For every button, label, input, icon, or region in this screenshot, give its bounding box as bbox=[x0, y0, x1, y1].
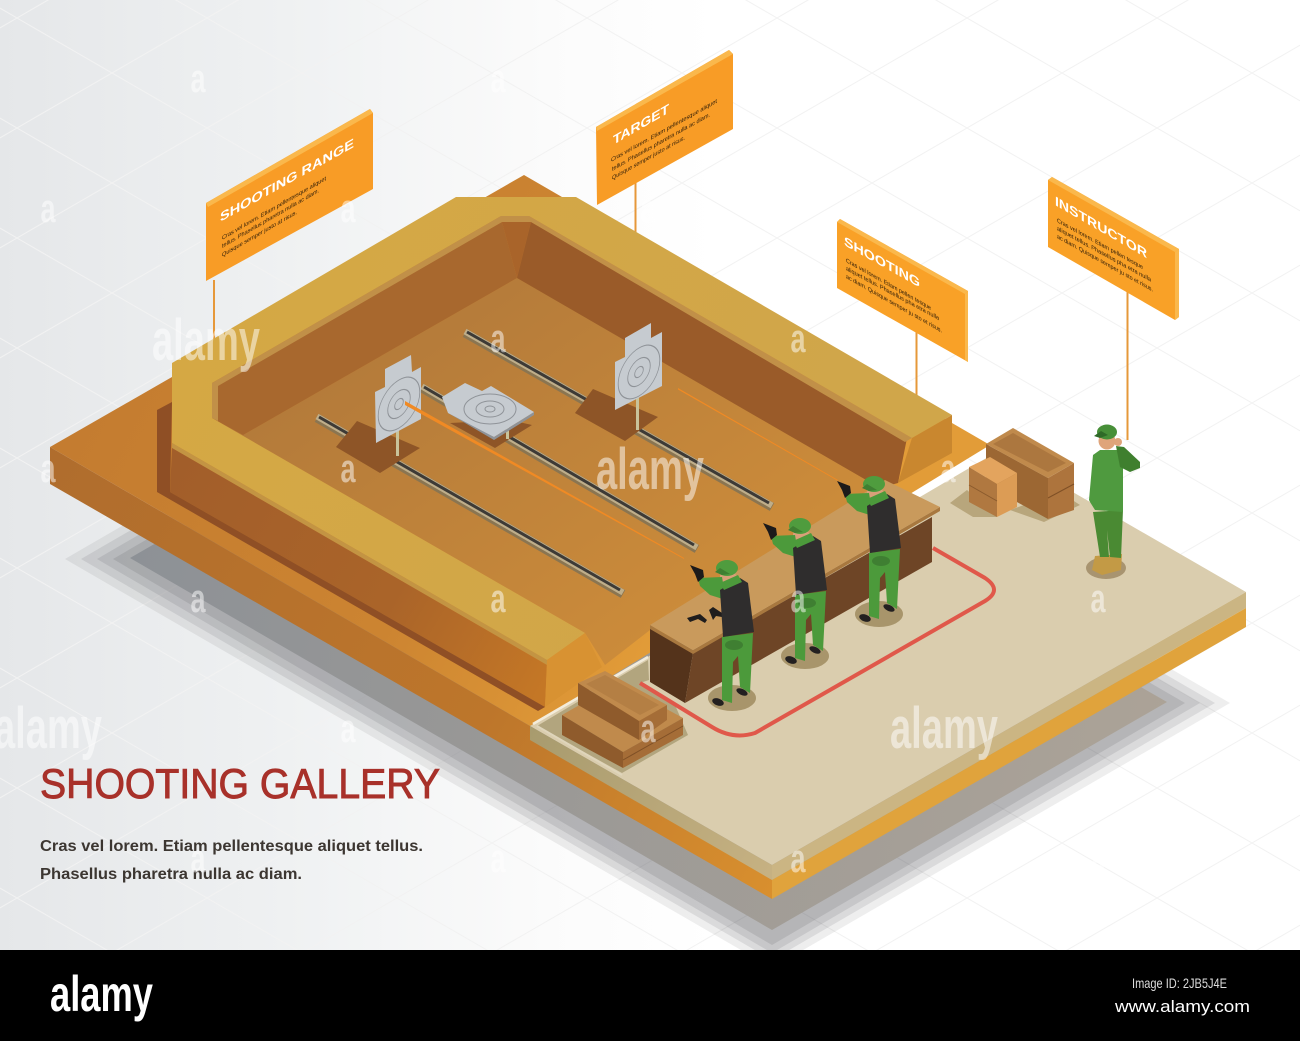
stock watermarks: a bbox=[1240, 447, 1256, 491]
stock watermarks: alamy bbox=[890, 696, 998, 761]
sign: shooting range bbox=[206, 109, 373, 281]
sign: shooting bbox=[837, 219, 968, 362]
instructor bbox=[1086, 424, 1140, 579]
sign heading: target: TARGET bbox=[613, 100, 669, 148]
laser beams bbox=[405, 388, 838, 559]
stock watermarks: a bbox=[340, 707, 356, 751]
shooter 2 bbox=[763, 518, 829, 669]
sign text: instructor: ac diam. Quisque semper ju sto et risus. bbox=[1057, 233, 1153, 294]
sign text: shooting range: Quisque semper justo at risus. bbox=[222, 209, 297, 259]
stock watermarks: a bbox=[1090, 57, 1106, 101]
platform ground shadow bbox=[65, 423, 1230, 968]
footer logo: alamy bbox=[50, 966, 153, 1022]
stock watermarks: a bbox=[1090, 317, 1106, 361]
sign text: shooting: Cras vel lorem. Etiam pellen tesque bbox=[846, 257, 931, 312]
stock watermarks: a bbox=[790, 57, 806, 101]
sign text: target: Quisque semper justo at risus. bbox=[612, 134, 685, 182]
stock watermarks: a bbox=[490, 577, 506, 621]
image id: Image ID: 2JB5J4E bbox=[1132, 975, 1227, 991]
rails bbox=[317, 332, 772, 594]
stock watermarks: a bbox=[940, 447, 956, 491]
stock watermarks bbox=[0, 57, 1256, 881]
sign text: target: Cras vel lorem. Etiam pellentesque aliquet bbox=[611, 98, 717, 164]
crates: front left bbox=[562, 671, 683, 768]
crates: back right bbox=[950, 428, 1080, 522]
sign text: shooting range: Cras vel lorem. Etiam pellentesque aliquet bbox=[222, 175, 326, 242]
stock watermarks: a bbox=[190, 577, 206, 621]
stock watermarks: a bbox=[1090, 837, 1106, 881]
title: SHOOTING GALLERY bbox=[40, 760, 440, 807]
sign poles bbox=[213, 180, 1128, 440]
description text: Phasellus pharetra nulla ac diam. bbox=[40, 866, 302, 883]
pit walls bbox=[212, 222, 907, 488]
sign heading: instructor: INSTRUCTOR bbox=[1055, 193, 1147, 261]
stock watermarks: a bbox=[790, 837, 806, 881]
description text bbox=[40, 838, 423, 883]
stock watermarks: a bbox=[940, 187, 956, 231]
website: www.alamy.com bbox=[1114, 997, 1250, 1016]
earth berm bbox=[157, 197, 952, 711]
sign text: instructor: Cras vel lorem. Etiam pellen tesque bbox=[1057, 217, 1143, 271]
shooting counter bbox=[650, 480, 940, 703]
red boundary line bbox=[640, 548, 994, 735]
range pit floor bbox=[212, 278, 890, 665]
sign: target bbox=[596, 50, 733, 205]
sign heading: shooting: SHOOTING bbox=[844, 233, 920, 290]
sign text: shooting range: tellus. Phasellus pharetra nulla ac diam. bbox=[222, 187, 319, 250]
stock watermarks: a bbox=[790, 317, 806, 361]
stock watermarks: a bbox=[190, 57, 206, 101]
target: flat middle bbox=[442, 383, 534, 448]
beige floor platform bbox=[530, 450, 1246, 899]
stock watermarks: alamy bbox=[596, 437, 704, 502]
target: standing left bbox=[336, 355, 421, 473]
stock watermarks: alamy bbox=[152, 308, 260, 373]
stock watermarks: a bbox=[340, 187, 356, 231]
sign text: instructor: aliquet tellus. Phasellus pha etra nulla bbox=[1057, 225, 1151, 284]
sign heading: shooting range: SHOOTING RANGE bbox=[220, 135, 354, 225]
sign text: shooting: ac diam. Quisque semper ju sto et risus. bbox=[846, 273, 942, 335]
stock watermarks: a bbox=[490, 57, 506, 101]
description text: Cras vel lorem. Etiam pellentesque aliquet tellus. bbox=[40, 838, 423, 855]
sign text: target: tellus. Phasellus pharetra nulla ac diam. bbox=[612, 111, 710, 173]
sign: instructor bbox=[1048, 177, 1179, 320]
stock watermarks: a bbox=[40, 447, 56, 491]
stock watermarks: a bbox=[490, 837, 506, 881]
shooter 1 bbox=[690, 560, 756, 711]
stock watermarks: a bbox=[340, 447, 356, 491]
footer bar bbox=[0, 950, 1300, 1041]
stock watermarks: a bbox=[640, 707, 656, 751]
target: standing right bbox=[575, 323, 662, 441]
stock watermarks: a bbox=[1240, 187, 1256, 231]
sign text: shooting: aliquet tellus. Phasellus pha etra nulla bbox=[846, 265, 939, 322]
shooter 3 bbox=[837, 476, 903, 627]
stock watermarks: a bbox=[190, 837, 206, 881]
orange base slab bbox=[50, 175, 990, 899]
stock watermarks: a bbox=[490, 317, 506, 361]
stock watermarks: a bbox=[40, 187, 56, 231]
stock watermarks: a bbox=[790, 577, 806, 621]
pistols on counter bbox=[687, 607, 722, 623]
stock watermarks: a bbox=[640, 187, 656, 231]
stock watermarks: a bbox=[1090, 577, 1106, 621]
